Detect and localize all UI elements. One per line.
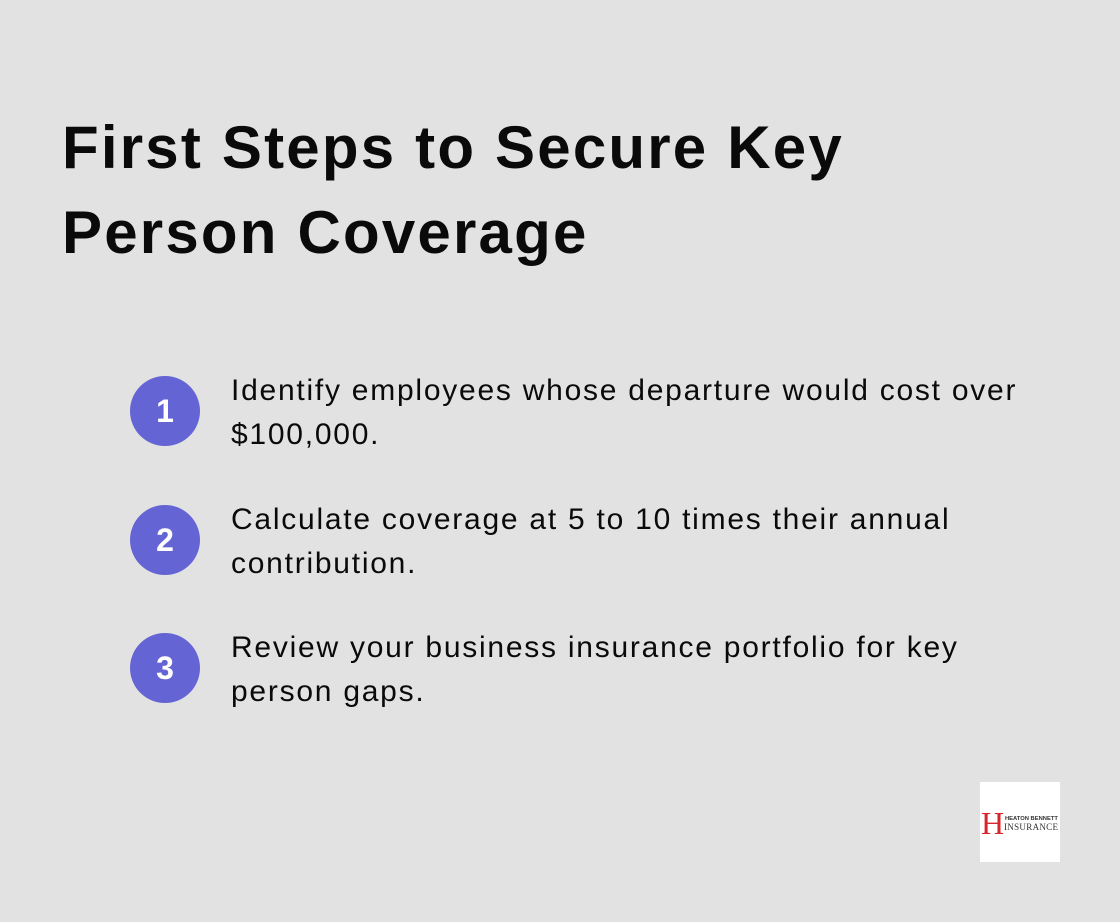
logo xyxy=(980,782,1060,862)
circle 2: 2 xyxy=(156,522,174,558)
title: First Steps to Secure Key Person Coverage xyxy=(62,114,844,266)
text 2: Calculate coverage at 5 to 10 times their annual contribution. xyxy=(231,503,950,580)
circle 1: 1 xyxy=(156,393,174,429)
step 3 xyxy=(130,631,959,708)
logo: H xyxy=(981,805,1004,841)
step 1 xyxy=(130,374,1017,451)
step 2 xyxy=(130,503,950,580)
circle 2 xyxy=(130,505,200,575)
text 1: Identify employees whose departure would cost over $100,000. xyxy=(231,374,1017,451)
logo: INSURANCE xyxy=(1004,822,1058,832)
circle 3 xyxy=(130,633,200,703)
logo: HEATON BENNETT xyxy=(1005,816,1058,822)
text 3: Review your business insurance portfolio for key person gaps. xyxy=(231,631,959,708)
circle 3: 3 xyxy=(156,650,174,686)
circle 1 xyxy=(130,376,200,446)
